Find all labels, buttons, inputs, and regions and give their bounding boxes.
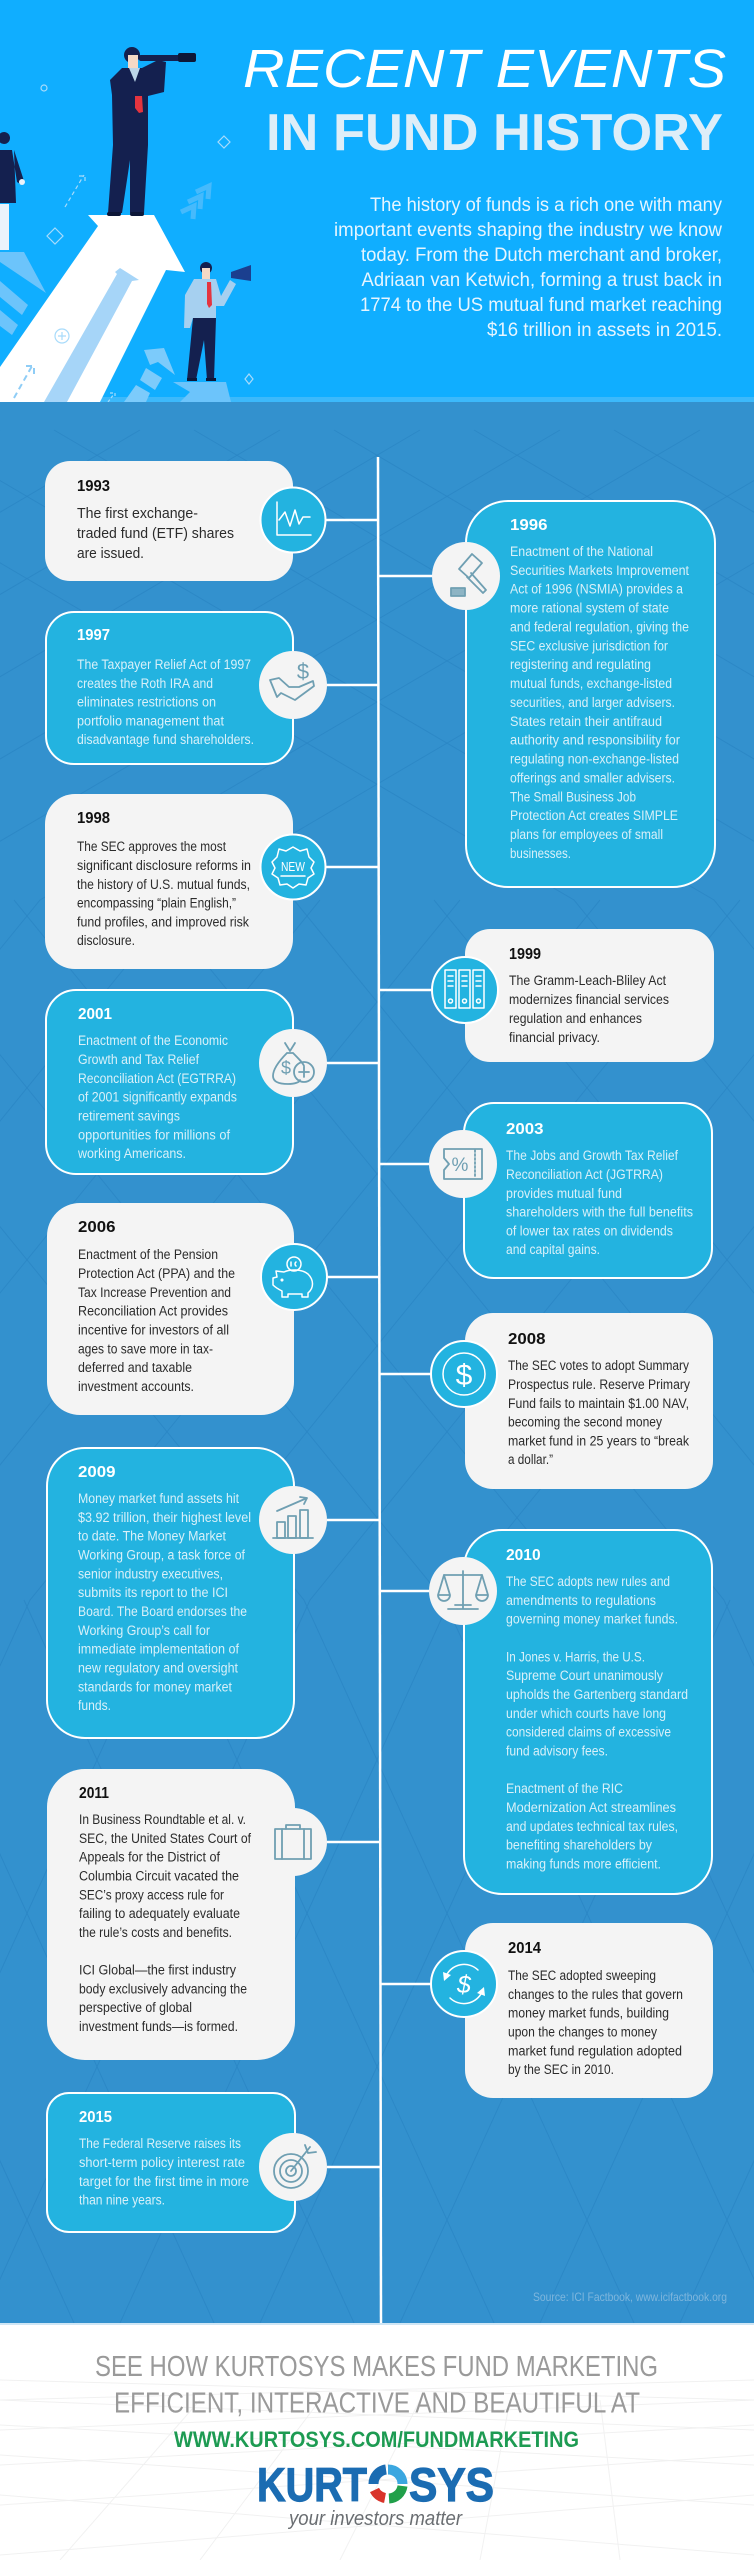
text: 1999: financial privacy. (509, 1029, 600, 1045)
event card: 2009 (47, 1448, 380, 1738)
text: 2009: to date. The Money Market (78, 1528, 226, 1544)
icon: new badge (260, 834, 326, 900)
text: 1997: eliminates restrictions on (77, 694, 216, 710)
text: 2011: ICI Global—the first industry (79, 1962, 236, 1978)
text: 2011: SEC’s proxy access rule for (79, 1888, 224, 1902)
text: 1996: Protection Act creates SIMPLE (510, 808, 678, 823)
icon: logo ring (373, 2470, 402, 2498)
year 1993: 1993 (77, 478, 110, 495)
text: 1997: disadvantage fund shareholders. (77, 732, 254, 747)
text: 2014 (508, 1968, 683, 2077)
intro paragraph: 1774 to the US mutual fund market reaching (360, 295, 722, 316)
text: 1997: portfolio management that (77, 714, 224, 728)
text: 2010: governing money market funds. (506, 1612, 678, 1626)
text: 2006 (78, 1247, 235, 1394)
text: 1996: States retain their antifraud (510, 714, 662, 729)
text: 1996: businesses. (510, 846, 571, 861)
event card: 2011 (47, 1769, 380, 2060)
icon: money bag with plus: $ (281, 1058, 291, 1078)
text: 2001: Reconciliation Act (EGTRRA) (78, 1071, 236, 1086)
text: 2009: Working Group, a task force of (78, 1548, 245, 1562)
text: 2003: shareholders with the full benefits (506, 1204, 693, 1220)
event card: 2010 (380, 1530, 712, 1894)
timeline background panel (0, 402, 754, 2323)
event card: 1993 (45, 461, 378, 581)
source note: Source: ICI Factbook, www.icifactbook.org (533, 2290, 727, 2304)
intro paragraph: The history of funds is a rich one with many (370, 195, 722, 216)
text: 2015 (79, 2136, 249, 2208)
icon: tax ticket: % (452, 1155, 469, 1176)
event card: 1998 (45, 794, 378, 969)
icon: dollar coin: $ (456, 1359, 473, 1392)
text: 2009: senior industry executives, (78, 1566, 223, 1582)
year 2001: 2001 (78, 1006, 112, 1023)
text: 2009: Board. The Board endorses the (78, 1604, 247, 1619)
text: 2010: fund advisory fees. (506, 1744, 608, 1758)
text: 2003: provides mutual fund (506, 1186, 622, 1201)
logo: Kurtosys: SYS (409, 2458, 494, 2511)
text: 2011: failing to adequately evaluate (79, 1906, 240, 1921)
text: 1998: fund profiles, and improved risk (77, 914, 249, 930)
icon: heartbeat chart (260, 488, 326, 552)
text: 2009: Working Group’s call for (78, 1623, 210, 1638)
text: 1998 (77, 839, 251, 948)
text: 2015: The Federal Reserve raises its (79, 2136, 241, 2151)
icon: rising bar chart (259, 1486, 327, 1554)
text: 2015: than nine years. (79, 2192, 165, 2208)
footer panel (0, 2323, 754, 2560)
text: 2010: In Jones v. Harris, the U.S. (506, 1650, 645, 1664)
text: 2010: benefiting shareholders by (506, 1838, 652, 1852)
text: 2003: Reconciliation Act (JGTRRA) (506, 1167, 663, 1182)
text: 2009: submits its report to the ICI (78, 1585, 228, 1600)
icon: scales (429, 1557, 497, 1625)
text: 2009: standards for money market (78, 1680, 232, 1694)
year 2014: 2014 (508, 1940, 541, 1957)
event card: 2006 (47, 1203, 379, 1415)
icon: tax ticket (429, 1130, 497, 1198)
text: 2001: working Americans. (77, 1146, 186, 1161)
text: 2008: Prospectus rule. Reserve Primary (508, 1377, 690, 1392)
icon: small left arrow with stripes (0, 252, 46, 335)
text: 1996: Securities Markets Improvement (510, 563, 689, 578)
text: 1998: encompassing “plain English,” (77, 896, 236, 910)
year 2008: 2008 (508, 1331, 546, 1348)
text: 1998: significant disclosure reforms in (77, 858, 251, 873)
text: 2008: becoming the second money (508, 1414, 662, 1430)
text: 2008: a dollar.” (508, 1452, 553, 1467)
text: 2003: and capital gains. (506, 1242, 600, 1257)
event card: 2008 (380, 1313, 713, 1489)
logo: Kurtosys: KURT (257, 2458, 367, 2511)
text: 2008: Fund fails to maintain $1.00 NAV, (508, 1396, 689, 1411)
text: 2008: The SEC votes to adopt Summary (508, 1358, 689, 1373)
text: 2010: upholds the Gartenberg standard (506, 1687, 688, 1702)
text: 2008 (508, 1358, 690, 1467)
text: 2011: perspective of global (79, 2000, 192, 2015)
text: 2010: under which courts have long (506, 1706, 666, 1721)
text: 1996: securities, and larger advisers. (510, 695, 675, 710)
text: 2003: The Jobs and Growth Tax Relief (506, 1148, 678, 1163)
text: 2001: retirement savings (78, 1108, 180, 1124)
website url: WWW.KURTOSYS.COM/FUNDMARKETING (174, 2427, 579, 2452)
call to action text (95, 2351, 658, 2420)
text: 2011: Appeals for the District of (79, 1850, 220, 1864)
text: 2009 (78, 1491, 251, 1713)
icon: gavel (432, 542, 500, 610)
text: 1996: offerings and smaller advisers. (510, 770, 675, 785)
text: 1996: Act of 1996 (NSMIA) provides a (510, 582, 683, 597)
text: 2009: immediate implementation of (78, 1642, 239, 1656)
text: 2009: Money market fund assets hit (78, 1491, 239, 1506)
text: 1996 (510, 544, 689, 861)
title: IN FUND HISTORY (266, 104, 723, 162)
icon: target with arrow (259, 2133, 327, 2201)
year 1998: 1998 (77, 810, 110, 827)
text: 2001 (77, 1033, 237, 1161)
text: 1996: mutual funds, exchange-listed (510, 676, 672, 691)
text: 2015: short-term policy interest rate (79, 2155, 245, 2170)
text: 2011 (79, 1812, 251, 2034)
event card: 2001 (46, 990, 379, 1174)
text: 2003: of lower tax rates on dividends (506, 1224, 673, 1238)
text: 1996: regulating non-exchange-listed (510, 752, 679, 767)
icon: man with telescope (107, 47, 196, 216)
text: 2009: $3.92 trillion, their highest level (78, 1510, 251, 1525)
text: 2001: of 2001 significantly expands (78, 1090, 237, 1104)
intro paragraph: today. From the Dutch merchant and broker, (361, 245, 722, 266)
icon: piggy bank (261, 1244, 327, 1310)
text: 1996: SEC exclusive jurisdiction for (510, 638, 668, 653)
text: 2003 (506, 1148, 693, 1257)
icon: briefcase (259, 1808, 327, 1876)
icon: binders (432, 957, 498, 1023)
timeline vertical line (378, 457, 381, 2323)
icon: dollar coin (431, 1341, 497, 1407)
text: 2001: opportunities for millions of (78, 1128, 230, 1142)
event card: 1999 (379, 929, 714, 1062)
text: 1996: Enactment of the National (510, 544, 653, 559)
intro paragraph: $16 trillion in assets in 2015. (487, 320, 722, 341)
icon: decorative small shapes (14, 85, 253, 402)
text: 2010: Modernization Act streamlines (506, 1800, 676, 1815)
header illustration: businesspeople on arrows (0, 47, 253, 402)
icon: man with megaphone (173, 262, 251, 402)
text: 1996: authority and responsibility for (510, 733, 680, 748)
text: 2010: The SEC adopts new rules and (506, 1574, 670, 1589)
year 1997: 1997 (77, 627, 110, 644)
text: 2011: SEC, the United States Court of (79, 1831, 251, 1846)
icon: hand with dollar (259, 651, 327, 719)
text: 1996: and federal regulation, giving the (510, 620, 689, 634)
text: 1996: more rational system of state (510, 601, 669, 616)
event card: 1996 (379, 501, 715, 887)
text: 1998: The SEC approves the most (77, 839, 226, 854)
text: 2010: Enactment of the RIC (506, 1781, 623, 1796)
text: 2014: upon the changes to money (508, 2024, 657, 2040)
text: 1999: The Gramm-Leach-Bliley Act (509, 972, 666, 988)
icon: big white arrow (0, 215, 185, 402)
call to action text: EFFICIENT, INTERACTIVE AND BEAUTIFUL AT (114, 2388, 640, 2420)
icon: hand with dollar: $ (297, 659, 309, 684)
intro paragraph: important events shaping the industry we know (334, 220, 722, 241)
text: 2006: Tax Increase Prevention and (78, 1285, 231, 1300)
text: 2014: The SEC adopted sweeping (508, 1968, 656, 1983)
year 1999: 1999 (509, 946, 541, 963)
text: 1996: registering and regulating (510, 657, 651, 672)
text: 1993: The first exchange- (77, 506, 198, 522)
text: 2010 (506, 1574, 688, 1872)
text: 2006: Protection Act (PPA) and the (78, 1266, 235, 1281)
year 2011: 2011 (79, 1785, 109, 1802)
text: 2010: amendments to regulations (506, 1593, 656, 1608)
text: 1997: creates the Roth IRA and (77, 676, 213, 691)
text: 2011: the rule’s costs and benefits. (79, 1925, 232, 1940)
text: 2001: Growth and Tax Relief (78, 1052, 199, 1067)
text: 1998: disclosure. (77, 933, 135, 948)
text: 1993: are issued. (77, 546, 144, 562)
icon: woman (0, 132, 25, 250)
year 1996: 1996 (510, 517, 548, 534)
event card: 2003 (380, 1103, 712, 1278)
icon: lower arrow stripes (124, 348, 175, 402)
text: 2006: incentive for investors of all (78, 1322, 229, 1338)
year 2010: 2010 (506, 1547, 541, 1564)
intro paragraph: Adriaan van Ketwich, forming a trust back in (362, 270, 722, 291)
text: 2010: making funds more efficient. (506, 1856, 661, 1872)
text: 2009: funds. (78, 1698, 111, 1713)
event card: 1997 (46, 612, 378, 764)
text: 2011: In Business Roundtable et al. v. (79, 1812, 246, 1827)
text: 2006: deferred and taxable (78, 1360, 192, 1375)
year 2015: 2015 (79, 2109, 112, 2126)
text: 2006: ages to save more in tax- (78, 1342, 213, 1356)
text: 2011: body exclusively advancing the (79, 1982, 247, 1996)
text: 1999: modernizes financial services (509, 991, 669, 1007)
text: 2014: changes to the rules that govern (508, 1987, 683, 2002)
year 2003: 2003 (506, 1121, 544, 1138)
text: 1996: plans for employees of small (510, 827, 663, 842)
text: 2014: money market funds, building (508, 2006, 669, 2020)
text: 2015: target for the first time in more (79, 2174, 249, 2189)
event card: 2014 (381, 1923, 713, 2098)
text: 2010: considered claims of excessive (506, 1724, 671, 1740)
text: 1999: regulation and enhances (509, 1010, 642, 1026)
text: 2010: and updates technical tax rules, (506, 1819, 678, 1834)
text: 2010: Supreme Court unanimously (506, 1668, 663, 1683)
text: 1997 (77, 657, 254, 747)
text: 2014: by the SEC in 2010. (508, 2062, 614, 2077)
icon: new badge: NEW (281, 859, 306, 874)
text: 2008: market fund in 25 years to “break (508, 1434, 689, 1448)
text: 1993: traded fund (ETF) shares (77, 526, 234, 542)
text: 1999 (509, 972, 669, 1045)
logo: Kurtosys (257, 2458, 494, 2511)
text: 2001: Enactment of the Economic (78, 1033, 228, 1048)
text: 2014: market fund regulation adopted (508, 2044, 682, 2058)
title: RECENT EVENTS (243, 39, 726, 99)
text: 2009: new regulatory and oversight (78, 1660, 238, 1676)
text: 2006: Enactment of the Pension (78, 1247, 218, 1262)
icon: chevrons (181, 186, 209, 219)
tagline: your investors matter (287, 2508, 463, 2530)
icon: dollar cycle: $ (456, 1971, 472, 1999)
icon: dollar cycle (431, 1951, 497, 2017)
text: 2011: investment funds—is formed. (79, 2019, 238, 2034)
text: 2006: investment accounts. (78, 1379, 194, 1394)
intro paragraph (334, 195, 722, 341)
year 2006: 2006 (78, 1219, 116, 1236)
event card: 2015 (47, 2093, 381, 2232)
text: 1996: The Small Business Job (510, 789, 636, 804)
title (243, 39, 726, 162)
year 2009: 2009 (78, 1464, 116, 1481)
text: 1998: the history of U.S. mutual funds, (77, 877, 250, 892)
text: 2006: Reconciliation Act provides (78, 1304, 228, 1318)
text: 1993 (77, 506, 234, 562)
text: 2011: Columbia Circuit vacated the (79, 1868, 239, 1884)
icon: money bag with plus (259, 1029, 327, 1097)
header panel (0, 0, 754, 402)
text: 1997: The Taxpayer Relief Act of 1997 (77, 657, 251, 672)
